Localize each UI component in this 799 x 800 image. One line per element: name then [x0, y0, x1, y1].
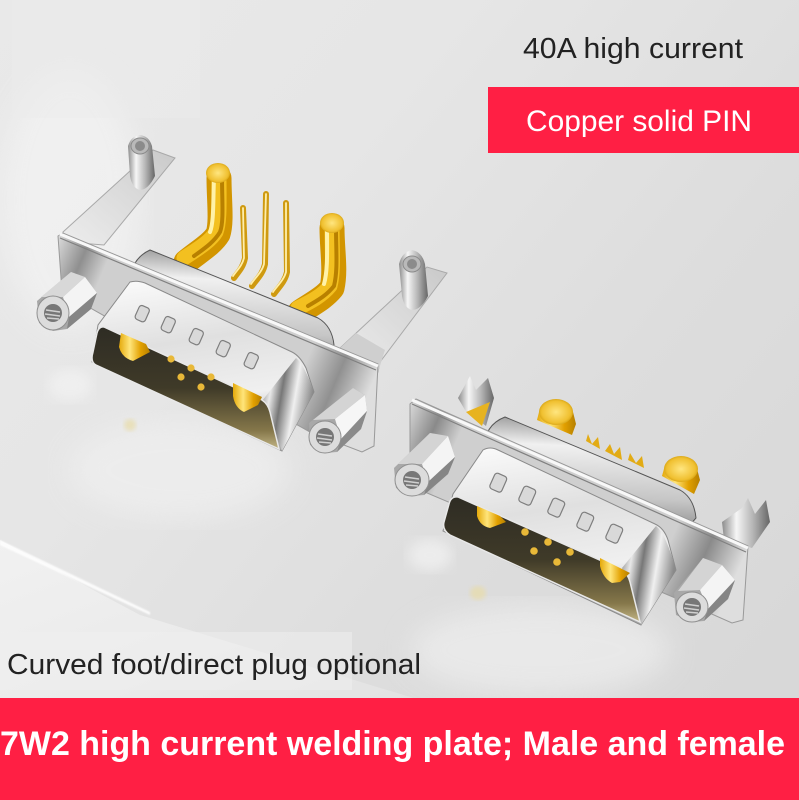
rear screw left — [128, 135, 155, 190]
hex nut right — [674, 558, 735, 622]
badge: Copper solid PIN: Copper solid PIN — [526, 105, 752, 138]
rear bracket left — [63, 150, 175, 245]
shell side — [622, 526, 676, 625]
pin caps — [206, 163, 344, 233]
connector: right straight male — [394, 376, 770, 625]
gold pins — [184, 178, 336, 312]
shell side — [262, 358, 314, 451]
slots — [134, 305, 259, 370]
back shell — [130, 250, 334, 360]
cavity — [92, 327, 279, 449]
badge: Copper solid PIN — [488, 87, 799, 153]
rear bracket right — [338, 267, 447, 372]
contacts — [119, 333, 262, 412]
connector: left right-angle male — [37, 135, 447, 453]
footer banner — [0, 698, 799, 800]
rear screw right — [399, 250, 428, 310]
front shell — [92, 281, 314, 451]
solder clips right — [722, 498, 770, 548]
slots — [489, 472, 624, 544]
front shell — [443, 448, 676, 625]
hex nut left — [37, 272, 97, 331]
gold cylinders — [537, 399, 700, 494]
caption: 40A high current: 40A high current — [523, 33, 743, 65]
flange edge — [412, 400, 748, 548]
footer banner: 7W2 high current welding plate; Male and female — [0, 725, 785, 763]
solder clips left — [458, 376, 494, 426]
flange edge — [60, 234, 378, 366]
back shell — [484, 417, 696, 525]
hex nut left — [394, 433, 455, 496]
flange plate — [58, 233, 378, 452]
cavity — [444, 497, 640, 622]
contacts — [477, 506, 630, 583]
flange plate — [410, 399, 748, 623]
caption: Curved foot/direct plug optional: Curved foot/direct plug optional — [7, 649, 421, 681]
hex nut right — [309, 388, 367, 453]
